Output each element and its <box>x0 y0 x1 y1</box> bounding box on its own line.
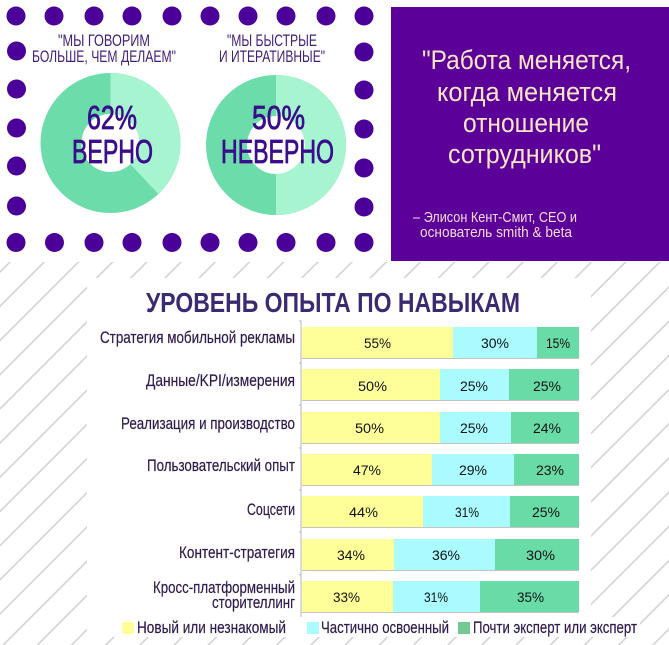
row: user experience: 23% <box>536 462 564 478</box>
row: user experience: 47% <box>353 462 381 478</box>
quote text: сотрудников" <box>448 139 601 169</box>
row: mobile ad strategy: 55% <box>364 335 391 351</box>
row: content strategy: 34% <box>337 547 365 563</box>
donut value: 62% ВЕРНО <box>72 99 153 170</box>
donut value: 50% НЕВЕРНО: 50% <box>252 99 305 136</box>
chart axis <box>299 321 301 617</box>
heading: we talk more than we do: "МЫ ГОВОРИМ <box>58 31 150 50</box>
row: data, KPI, measurement: 25% <box>533 378 561 394</box>
quote text: отношение <box>463 108 589 138</box>
row: mobile ad strategy: 15% <box>546 335 570 351</box>
dotted border <box>6 6 374 252</box>
panel: quote <box>391 7 669 261</box>
quote attribution: – Элисон Кент-Смит, CEO и <box>413 209 577 226</box>
row: implementation and production: 24% <box>533 420 561 436</box>
stacked bar chart: skills <box>100 321 579 617</box>
row: implementation and production <box>121 412 579 444</box>
row: social media: 44% <box>349 504 378 520</box>
row: cross-platform storytelling: Кросс-платформенный <box>153 579 295 597</box>
row: data, KPI, measurement: Данные/KPI/измерения <box>146 372 295 390</box>
row: cross-platform storytelling: 35% <box>517 589 544 605</box>
row: social media: 25% <box>532 504 560 520</box>
row: user experience: 29% <box>459 462 487 478</box>
row: cross-platform storytelling: 33% <box>333 589 360 605</box>
donut chart: 62% true <box>61 73 180 194</box>
row: user experience: Пользовательский опыт <box>147 457 295 475</box>
quote text <box>422 45 631 169</box>
row: content strategy: 36% <box>432 547 460 563</box>
quote attribution: основатель smith & beta <box>420 224 573 241</box>
heading: we talk more than we do: БОЛЬШЕ, ЧЕМ ДЕЛАЕМ" <box>32 47 176 66</box>
donut chart: 50% false <box>226 75 346 215</box>
donut value: 50% НЕВЕРНО <box>221 99 334 170</box>
heading: we are fast and iterative: И ИТЕРАТИВНЫЕ" <box>219 47 325 66</box>
panel: survey donuts with dotted border <box>6 6 374 252</box>
row: data, KPI, measurement: 50% <box>358 378 387 394</box>
heading: we talk more than we do <box>32 31 176 66</box>
row: implementation and production: 25% <box>460 420 488 436</box>
row: user experience <box>147 454 579 486</box>
legend item: partly mastered: Частично освоенный <box>321 619 449 637</box>
row: cross-platform storytelling <box>153 579 579 613</box>
legend <box>122 619 637 637</box>
heading: we are fast and iterative <box>219 31 325 66</box>
row: mobile ad strategy <box>100 327 579 359</box>
legend item: new or unfamiliar: Новый или незнакомый <box>137 619 286 637</box>
chart title: УРОВЕНЬ ОПЫТА ПО НАВЫКАМ <box>146 287 520 318</box>
row: data, KPI, measurement: 25% <box>460 378 488 394</box>
donut value: 50% НЕВЕРНО: НЕВЕРНО <box>221 133 334 170</box>
quote attribution <box>413 209 577 241</box>
row: social media: Соцсети <box>247 501 295 519</box>
row: mobile ad strategy: 30% <box>481 335 509 351</box>
row: implementation and production: 50% <box>355 420 384 436</box>
row: implementation and production: Реализация и производство <box>121 415 295 433</box>
quote text: когда меняется <box>437 77 617 107</box>
row: social media <box>247 496 579 528</box>
quote text: "Работа меняется, <box>422 45 631 75</box>
row: cross-platform storytelling: 31% <box>424 589 448 605</box>
donut value: 62% ВЕРНО: 62% <box>87 99 137 136</box>
row: content strategy: Контент-стратегия <box>179 544 295 562</box>
donut value: 62% ВЕРНО: ВЕРНО <box>72 133 153 170</box>
row: data, KPI, measurement <box>146 369 579 401</box>
row: cross-platform storytelling: сторителлинг <box>212 594 295 612</box>
heading: we are fast and iterative: "МЫ БЫСТРЫЕ <box>227 31 317 50</box>
row: mobile ad strategy: Стратегия мобильной рекламы <box>100 329 295 347</box>
row: content strategy: 30% <box>526 547 555 563</box>
row: content strategy <box>179 539 579 571</box>
row: social media: 31% <box>455 504 479 520</box>
